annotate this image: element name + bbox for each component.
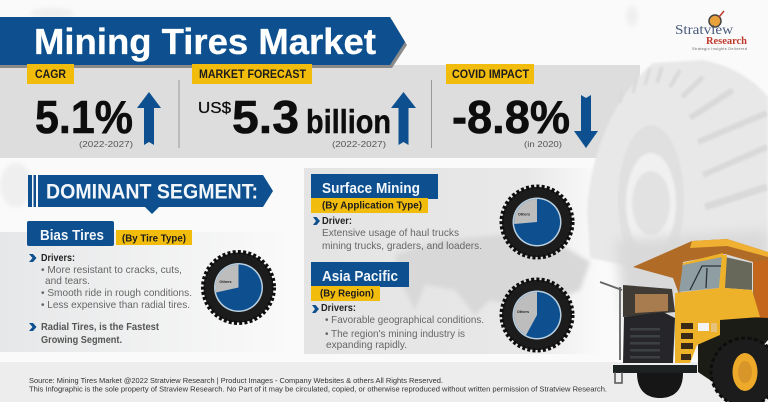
tag: by application type	[311, 198, 428, 213]
pie tire: asia pacific	[502, 280, 572, 350]
text: drivers: and tears.	[45, 275, 90, 287]
tag: by region	[311, 286, 380, 301]
text: fastest growing segment	[41, 321, 159, 346]
footer text: This Infographic is the sole property of Straview Research. No Part of it may be circulated, copied, or otherwise reproduced without written permission of Stratview Research.	[29, 384, 607, 394]
gray smear behind truck	[615, 230, 768, 350]
title: Mining Tires Market	[34, 21, 376, 62]
icon: up arrow	[137, 92, 161, 145]
text: drivers: • Less expensive than radial tires.	[41, 299, 190, 311]
rear wheel	[711, 338, 768, 402]
icon: chevron	[313, 217, 320, 225]
left panel background	[0, 232, 295, 352]
text: drivers	[321, 302, 484, 351]
text: fastest growing segment: Radial Tires, is the Fastest	[41, 321, 159, 333]
ladder	[615, 372, 622, 383]
tag: by application type: (By Application Type)	[322, 200, 422, 212]
panel: asia pacific	[311, 262, 572, 351]
panel: bias tires	[27, 221, 274, 346]
icon: chevron	[312, 305, 319, 313]
pie tire: bias tires	[203, 252, 274, 323]
logo: Stratview Research: Stratview	[675, 23, 734, 38]
value: US$ 5.3 billion: billion	[306, 103, 391, 140]
gray band	[0, 65, 640, 158]
tag: by region: (By Region)	[320, 288, 374, 300]
heading: bias tires: Bias Tires	[40, 228, 104, 244]
value: US$ 5.3 billion	[198, 91, 391, 143]
stairs	[681, 323, 693, 360]
value: US$ 5.3 billion: 5.3	[232, 91, 299, 143]
stat: covid impact	[446, 64, 598, 149]
text: driver	[322, 215, 482, 252]
heading: asia pacific: Asia Pacific	[322, 269, 398, 285]
period: 2022-2027: (2022-2027)	[332, 139, 386, 149]
ghost tire background	[587, 60, 768, 275]
text: fastest growing segment: Growing Segment.	[41, 334, 122, 346]
icon: up arrow	[391, 92, 416, 145]
lights	[698, 323, 709, 331]
tag: by tire type	[116, 230, 192, 245]
truck	[600, 239, 768, 402]
yellow cab body	[675, 255, 760, 363]
dump bed	[633, 239, 768, 320]
railing and radiator top	[623, 285, 675, 317]
text: drivers: expanding rapidly.	[326, 339, 407, 351]
front wheel	[637, 373, 683, 398]
footer text	[29, 376, 607, 394]
text: drivers: • The region's mining industry is	[325, 328, 465, 340]
period: 2022-2027: (2022-2027)	[79, 139, 133, 149]
text: driver: Driver:	[322, 215, 352, 227]
label: market forecast: MARKET FORECAST	[199, 69, 306, 81]
footer text: Source: Mining Tires Market @2022 Stratview Research | Product Images - Company Websites & others All Rights Reserved.	[29, 376, 443, 385]
stat: market forecast	[192, 64, 416, 149]
dark chassis	[698, 315, 768, 390]
heading: dominant segment	[28, 175, 273, 214]
tag: by tire type: (By Tire Type)	[122, 234, 186, 244]
text: drivers	[41, 252, 192, 311]
label: CAGR: CAGR	[35, 69, 67, 81]
middle panel with map	[304, 168, 600, 354]
label: covid impact	[446, 64, 534, 84]
panel: surface mining	[311, 174, 572, 258]
label: market forecast	[192, 64, 312, 84]
text: drivers: • More resistant to cracks, cuts,	[41, 264, 182, 276]
text: drivers: Drivers:	[41, 252, 75, 264]
value: US$ 5.3 billion: US$	[198, 100, 231, 117]
black engine hood	[623, 312, 675, 363]
title banner	[0, 17, 407, 68]
logo: Stratview Research	[675, 11, 747, 51]
logo: Stratview Research: Research	[706, 36, 747, 47]
icon: chevron	[29, 254, 36, 262]
period: in 2020: (in 2020)	[524, 139, 562, 149]
heading: surface mining: Surface Mining	[322, 181, 420, 197]
label: covid impact: COVID IMPACT	[452, 69, 529, 81]
pie tire: surface mining: Others	[518, 212, 530, 216]
pie tire: asia pacific: Others	[517, 310, 529, 314]
stat: CAGR	[27, 64, 161, 149]
cab window	[683, 253, 723, 267]
value: 5.1%: 5.1%	[35, 91, 133, 143]
heading: dominant segment: DOMINANT SEGMENT:	[46, 180, 258, 204]
pie tire: surface mining	[502, 186, 572, 258]
text: drivers: • Smooth ride in rough conditions.	[41, 287, 192, 299]
text: drivers: Drivers:	[321, 302, 356, 314]
bumper	[613, 365, 697, 373]
text: drivers: • Favorable geographical conditions.	[325, 314, 484, 326]
icon: chevron	[29, 323, 36, 331]
text: driver: Extensive usage of haul trucks	[322, 227, 459, 239]
value: -8.8%: -8.8%	[452, 91, 570, 143]
logo: Stratview Research: Strategic Insights Delivered	[692, 47, 747, 51]
pie tire: bias tires: Others	[219, 280, 232, 284]
footer band	[0, 362, 768, 402]
heading: surface mining	[311, 174, 438, 199]
divider	[431, 80, 432, 148]
grunge texture	[0, 6, 638, 207]
heading: bias tires	[27, 221, 114, 246]
icon: down arrow	[574, 95, 598, 148]
divider	[178, 80, 180, 148]
text: driver: mining trucks, graders, and loaders.	[322, 240, 482, 252]
heading: asia pacific	[311, 262, 409, 287]
